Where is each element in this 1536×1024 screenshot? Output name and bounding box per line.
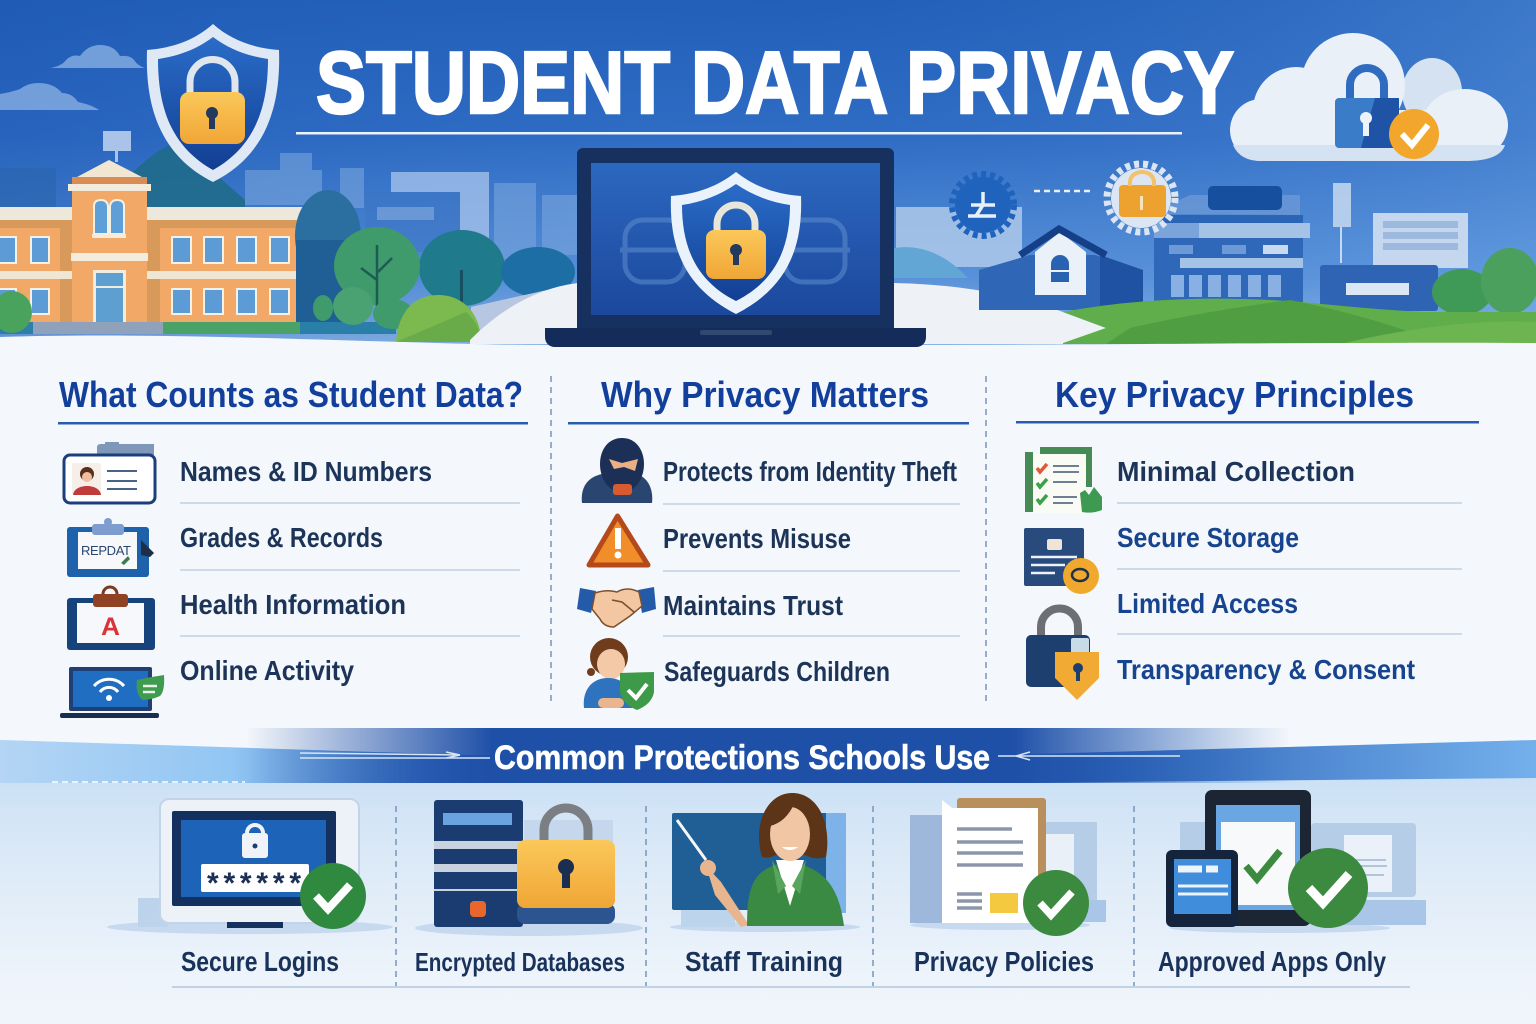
protection: staff training	[670, 793, 860, 977]
section banner: common protections schools use	[0, 728, 1536, 783]
divider	[985, 376, 987, 706]
icon: login monitor: ******	[207, 867, 301, 900]
panel: key privacy principles	[1016, 374, 1479, 700]
protection: approved apps only	[1158, 790, 1426, 977]
laptop with shield	[545, 148, 926, 347]
icon: medical case: A	[101, 613, 120, 641]
icon: report clipboard	[67, 518, 154, 577]
item: limited access: Limited Access	[1117, 588, 1298, 619]
trees and bushes left of laptop	[295, 190, 578, 342]
icon: login monitor	[107, 799, 393, 934]
divider	[872, 806, 874, 986]
item: safeguards children: Safeguards Children	[664, 656, 890, 687]
icon: report clipboard: REPDAT	[81, 543, 131, 558]
divider	[550, 376, 552, 706]
city buildings right of laptop	[894, 183, 1468, 311]
green hill and trees at right	[1063, 248, 1536, 344]
divider	[645, 806, 647, 986]
icon: server with padlock	[415, 800, 643, 936]
rule under protections	[172, 986, 1410, 988]
icon: teacher at board	[670, 793, 860, 932]
section banner: common protections schools use: Common Protections Schools Use	[494, 739, 990, 777]
white hill behind laptop	[470, 283, 1106, 344]
icon: cloud with padlock and check	[1230, 33, 1508, 161]
divider	[395, 806, 397, 986]
item: online activity: Online Activity	[180, 655, 354, 686]
protection: secure logins	[107, 799, 393, 977]
icon: medical case	[67, 587, 155, 650]
icon: warning triangle	[589, 516, 648, 565]
icon: id card	[64, 442, 155, 503]
heading: what counts as student data: What Counts as Student Data?	[59, 374, 523, 415]
item: transparency and consent: Transparency & Consent	[1117, 654, 1415, 685]
label: encrypted databases: Encrypted Databases	[415, 947, 625, 977]
panel: why privacy matters	[568, 374, 969, 710]
label: secure logins: Secure Logins	[181, 946, 339, 977]
item: protects from identity theft: Protects from Identity Theft	[663, 456, 957, 487]
protection: privacy policies	[910, 798, 1106, 977]
icon: gear network connection	[952, 164, 1175, 236]
icon: masked thief	[582, 438, 652, 503]
icon: handshake	[577, 587, 656, 627]
icon: header shield with padlock	[147, 24, 279, 182]
icon: child with green shield	[584, 638, 654, 710]
icon: secure storage	[1024, 528, 1099, 594]
divider	[1133, 806, 1135, 986]
heading: key privacy principles: Key Privacy Principles	[1055, 374, 1414, 415]
icon: laptop with wifi	[60, 667, 164, 718]
item: minimal collection: Minimal Collection	[1117, 456, 1355, 487]
item: maintains trust: Maintains Trust	[663, 590, 843, 621]
wave edge of header	[0, 336, 1536, 362]
icon: tablets and devices	[1166, 790, 1426, 933]
heading: why privacy matters: Why Privacy Matters	[601, 374, 929, 415]
label: approved apps only: Approved Apps Only	[1158, 946, 1386, 977]
title: STUDENT DATA PRIVACY	[316, 33, 1234, 132]
icon: policy documents	[910, 798, 1106, 936]
panel: what counts as student data	[58, 374, 528, 718]
item: names and id numbers: Names & ID Numbers	[180, 456, 432, 487]
item: grades and records: Grades & Records	[180, 522, 383, 553]
item: prevents misuse: Prevents Misuse	[663, 523, 851, 554]
label: staff training: Staff Training	[685, 946, 843, 977]
icon: padlock with small shield	[1026, 608, 1099, 700]
label: privacy policies: Privacy Policies	[914, 946, 1094, 977]
item: health information: Health Information	[180, 589, 406, 620]
header banner illustration	[0, 0, 1536, 345]
icon: checklist	[1025, 447, 1102, 513]
protection: encrypted databases	[415, 800, 643, 977]
item: secure storage: Secure Storage	[1117, 522, 1299, 553]
protections background	[0, 740, 1536, 1024]
school building illustration	[0, 160, 319, 334]
